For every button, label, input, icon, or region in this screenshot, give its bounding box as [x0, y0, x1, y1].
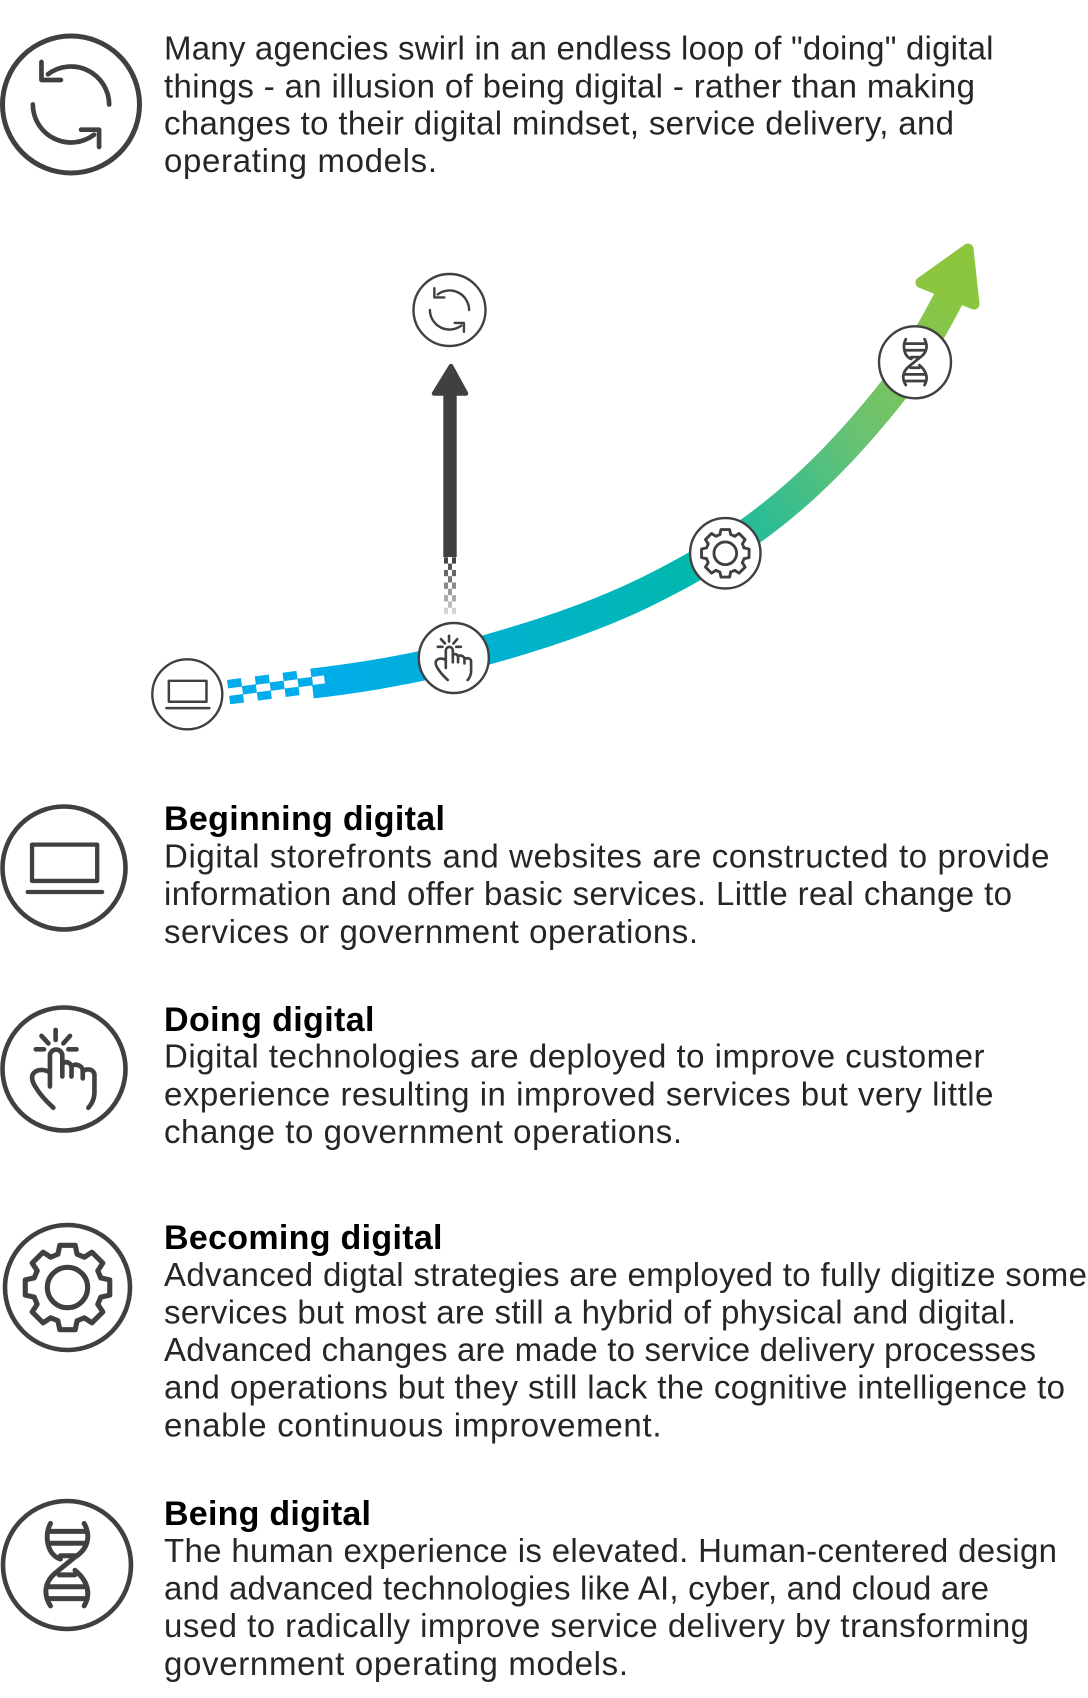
section: Becoming digital: services but most are still a hybrid of physical and digital.	[164, 1294, 1016, 1330]
icon: gear	[5, 1225, 130, 1350]
curve arrowhead	[921, 249, 974, 304]
node: loop	[414, 274, 486, 346]
node: dna	[879, 326, 951, 398]
grey arrow to loop	[434, 366, 466, 614]
section: Doing digital: change to government operations.	[164, 1113, 682, 1150]
icon: loop (intro)	[2, 36, 140, 173]
section: Becoming digital: enable continuous improvement.	[164, 1406, 662, 1444]
section: Beginning digital: Digital storefronts and websites are constructed to provide	[164, 838, 1050, 874]
intro text: things - an illusion of being digital - rather than making	[164, 68, 975, 104]
checker notch	[312, 675, 325, 685]
section: Being digital: government operating models.	[164, 1645, 628, 1682]
section: Being digital: and advanced technologies like AI, cyber, and cloud are	[164, 1570, 989, 1606]
section: Becoming digital: Becoming digital	[164, 1219, 442, 1257]
icon: dna	[3, 1501, 131, 1629]
intro text: changes to their digital mindset, service delivery, and	[164, 104, 954, 142]
section: Beginning digital: Beginning digital	[164, 800, 445, 838]
intro text: Many agencies swirl in an endless loop of "doing" digital	[164, 30, 994, 66]
section: Being digital: Being digital	[164, 1495, 371, 1533]
chart: digital maturity curve	[152, 249, 974, 729]
curve band	[312, 296, 950, 684]
section: Doing digital: Doing digital	[164, 1001, 374, 1039]
section: Becoming digital: Advanced digtal strategies are employed to fully digitize some	[164, 1256, 1087, 1293]
section: Being digital: used to radically improve service delivery by transforming	[164, 1607, 1029, 1644]
icon: laptop	[2, 806, 126, 930]
section: Becoming digital: and operations but they still lack the cognitive intelligence to	[164, 1368, 1065, 1406]
section: Beginning digital	[164, 800, 1050, 950]
node: gear	[690, 518, 760, 588]
section: Doing digital: experience resulting in improved services but very little	[164, 1076, 994, 1112]
intro text: operating models.	[164, 142, 437, 179]
section: Being digital: The human experience is elevated. Human-centered design	[164, 1532, 1057, 1569]
section: Doing digital	[164, 1001, 994, 1150]
curve checkered start	[227, 669, 313, 704]
section: Beginning digital: information and offer basic services. Little real change to	[164, 875, 1012, 912]
node: laptop	[152, 659, 222, 729]
section: Beginning digital: services or government operations.	[164, 913, 698, 950]
section: Becoming digital: Advanced changes are made to service delivery processes	[164, 1331, 1036, 1368]
intro text	[164, 30, 994, 179]
node: hand	[419, 623, 489, 693]
section: Doing digital: Digital technologies are deployed to improve customer	[164, 1038, 984, 1074]
section: Being digital	[164, 1495, 1057, 1682]
icon: hand	[2, 1008, 126, 1130]
section: Becoming digital	[164, 1219, 1087, 1444]
